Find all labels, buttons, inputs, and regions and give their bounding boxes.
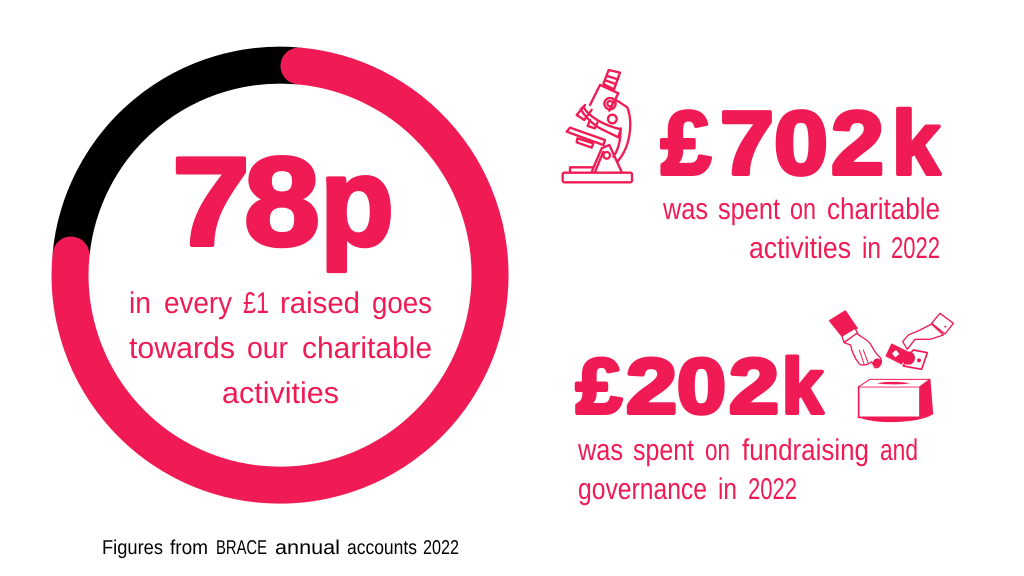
donut caption: activities [222, 377, 339, 410]
stat: 202k: 2 [729, 342, 779, 430]
text: fundraising spend: fundraising [742, 434, 869, 467]
black remainder arc [71, 65, 299, 255]
pink share arc [70, 66, 490, 485]
text: fundraising spend: in [718, 473, 737, 506]
donut caption: our [247, 332, 288, 365]
left sleeve [829, 311, 857, 337]
stat: 202k: 2 [626, 342, 677, 430]
headline: 78p: p [320, 131, 394, 272]
footnote: BRACE [216, 537, 267, 559]
left cuff [842, 328, 858, 342]
text: charitable spend: was [662, 193, 708, 226]
box side [920, 379, 933, 417]
donut caption: every [164, 287, 232, 320]
donut caption: towards [129, 332, 235, 365]
stat: 702k: £ [661, 94, 711, 194]
footnote: from [170, 537, 208, 559]
stat: 702k: 7 [720, 94, 774, 194]
text: fundraising spend: and [880, 434, 918, 467]
donut caption: goes [372, 287, 432, 320]
stat: 202k: 0 [677, 342, 726, 430]
right hand [903, 324, 943, 349]
box top [859, 379, 930, 387]
text: fundraising spend: spent [633, 434, 695, 467]
stat: 702k: k [892, 94, 941, 194]
donut chart: 78p share [70, 65, 490, 485]
text: fundraising spend: on [705, 434, 730, 467]
donut caption: charitable [302, 332, 432, 365]
text: fundraising spend: 2022 [748, 473, 797, 506]
stat: 202k [576, 342, 824, 430]
footnote: annual [275, 537, 340, 559]
donut caption: £1 [243, 287, 269, 320]
left hand [844, 333, 881, 368]
donut caption [129, 287, 432, 410]
headline: 78p [172, 131, 394, 272]
headline: 78p: 8 [244, 131, 320, 272]
stat: 702k: 2 [831, 94, 884, 194]
text: charitable spend: activities [749, 232, 851, 265]
text: fundraising spend: governance [578, 473, 707, 506]
stat: 202k: £ [576, 342, 622, 430]
donut caption: raised [280, 287, 360, 320]
banknote left block [886, 344, 907, 364]
text: charitable spend: in [862, 232, 881, 265]
footnote: accounts [347, 537, 417, 559]
footnote: 2022 [423, 537, 459, 559]
stat: 202k: k [782, 342, 824, 430]
headline: 78p: 7 [172, 131, 250, 272]
stat: 702k [661, 94, 941, 194]
text: charitable spend: on [790, 193, 816, 226]
donut caption: in [129, 287, 151, 320]
footnote: Figures [102, 537, 163, 559]
text: charitable spend: spent [718, 193, 781, 226]
icon: hands and donation box [829, 311, 953, 422]
text: charitable spend: charitable [827, 193, 940, 226]
box shadow [858, 414, 933, 422]
text: charitable spend: 2022 [891, 232, 940, 265]
text: charitable spend [662, 193, 940, 265]
stat: 702k: 0 [774, 94, 828, 194]
box front [859, 387, 920, 417]
text: fundraising spend [577, 434, 918, 506]
icon: microscope [563, 70, 632, 182]
right cuff [932, 313, 953, 334]
footnote [102, 537, 459, 559]
text: fundraising spend: was [577, 434, 623, 467]
banknote right block [903, 350, 927, 369]
